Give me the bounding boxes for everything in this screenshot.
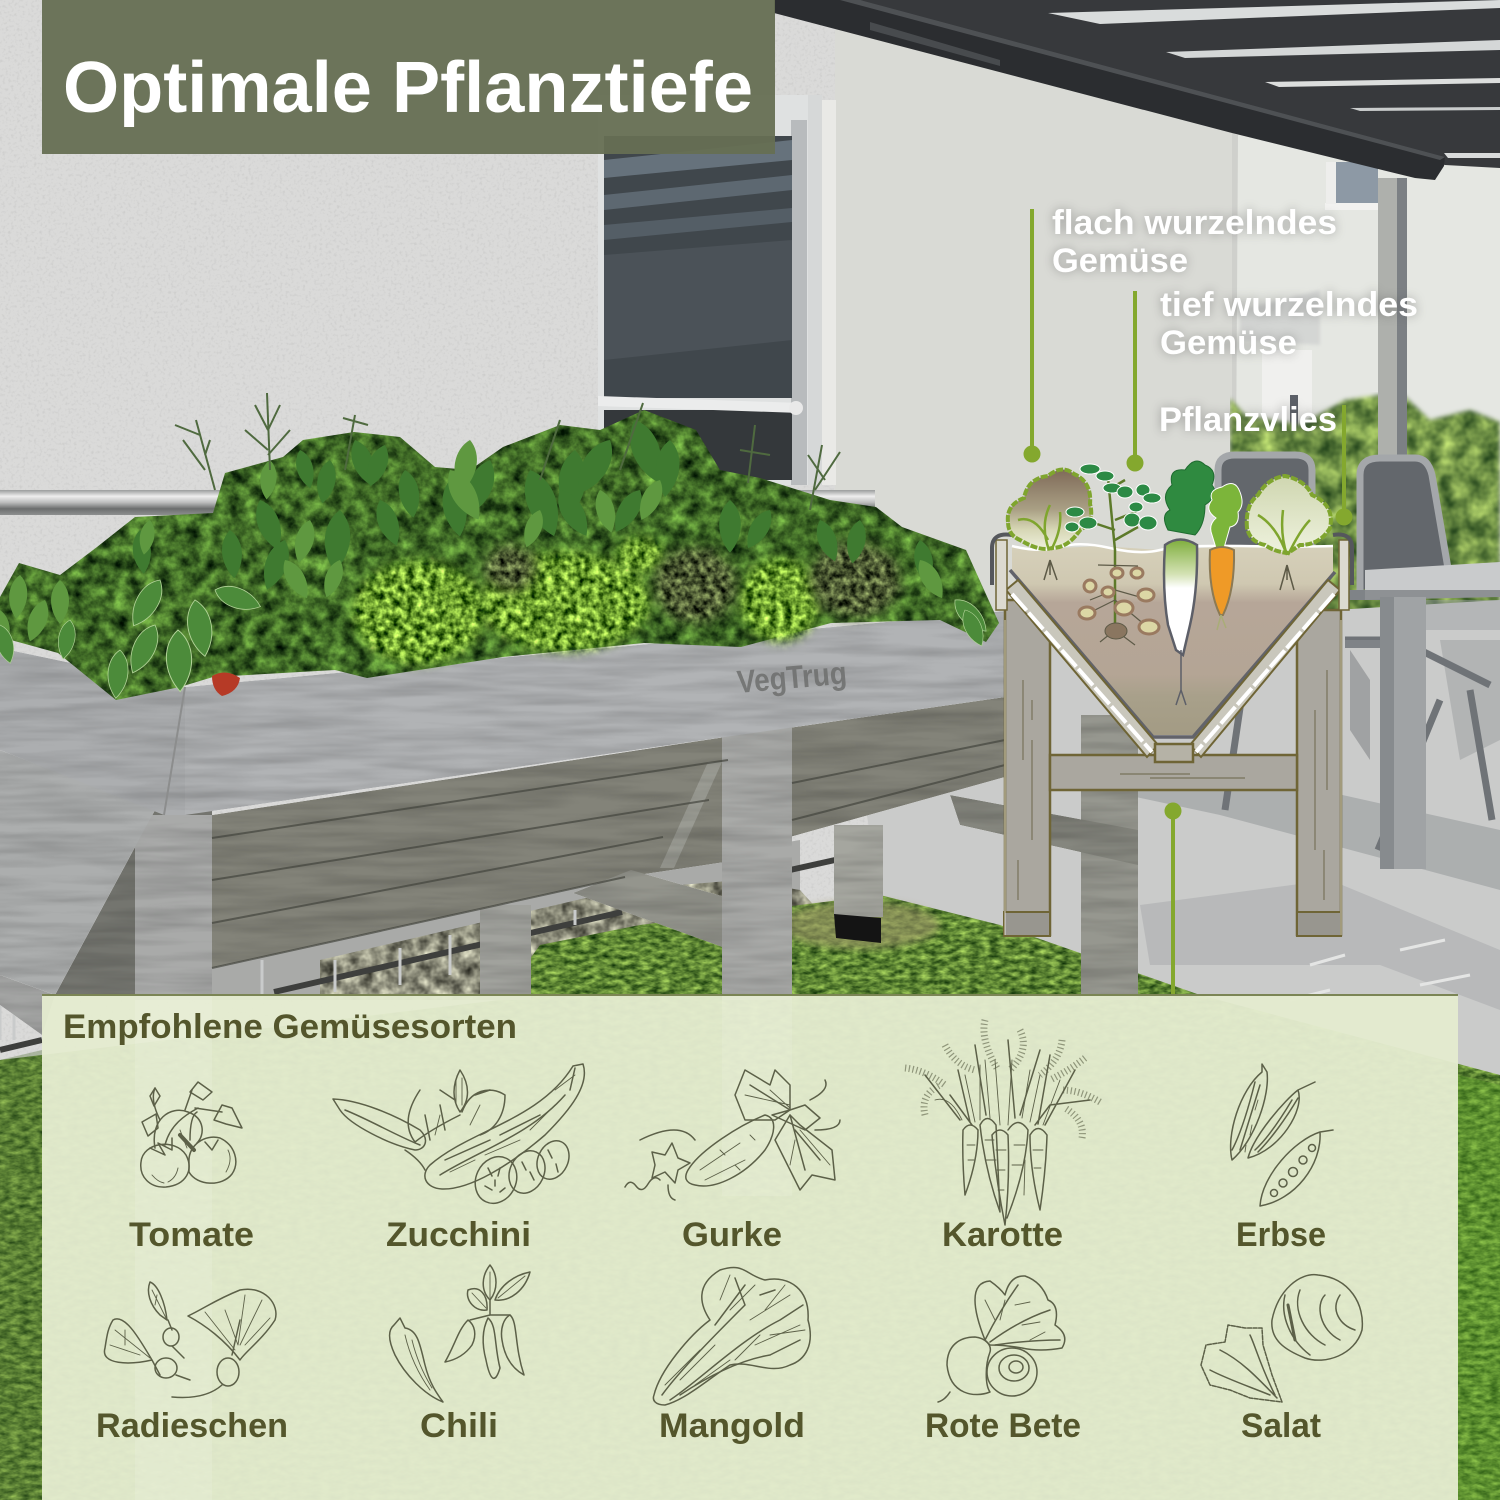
grey fleece liner — [1010, 570, 1335, 737]
hedge — [1230, 392, 1500, 640]
icon: zucchini — [333, 1064, 584, 1210]
leg foot — [834, 914, 881, 943]
bed brand mark: VegTrug — [735, 655, 848, 700]
panel: recommended vegetable varieties — [42, 994, 1458, 1500]
lower metal railing — [0, 860, 835, 1050]
icon: cucumber — [625, 1070, 840, 1200]
vegetable names, second row: Mangold — [659, 1407, 805, 1445]
icon: beetroot — [938, 1276, 1065, 1402]
foliage mass — [0, 410, 999, 700]
vegetable names, first row: Erbse — [1236, 1216, 1326, 1254]
crossbar — [1050, 755, 1297, 790]
lawn — [0, 895, 1500, 1500]
vegetable names, first row: Gurke — [682, 1216, 782, 1254]
icon: carrots — [905, 1020, 1100, 1225]
ground under the bed — [212, 840, 900, 1000]
label: flach wurzelndes Gemüse: flach wurzelndes — [1052, 204, 1337, 242]
planter cross-section diagram — [992, 461, 1352, 936]
building on the right — [1232, 130, 1500, 470]
pergola roof — [774, 0, 1500, 180]
vegetable names, second row: Chili — [420, 1407, 498, 1445]
label: tief wurzelndes Gemüse — [1160, 286, 1418, 362]
icon: peas — [1231, 1064, 1333, 1206]
label: tief wurzelndes Gemüse: tief wurzelndes — [1160, 286, 1418, 324]
slanted side boards — [212, 697, 1005, 968]
callout line: recommended varieties — [1164, 802, 1182, 995]
label: flach wurzelndes Gemüse: Gemüse — [1052, 242, 1188, 280]
planted foliage — [0, 393, 999, 700]
individual leaves — [0, 415, 992, 699]
callout line: Pflanzvlies — [1336, 405, 1352, 526]
title: Optimale Pflanztiefe — [63, 48, 753, 128]
panel heading: Empfohlene Gemüsesorten — [63, 1008, 517, 1046]
icon: lettuce — [1201, 1275, 1362, 1402]
right plank — [1190, 580, 1340, 757]
herb stems — [175, 393, 840, 510]
callout line: flach wurzelndes Gemüse — [1024, 209, 1040, 462]
patio floor — [840, 600, 1500, 1075]
vegetable names, first row: Karotte — [942, 1216, 1063, 1254]
left side post — [992, 535, 1012, 610]
right lettuce — [1247, 476, 1331, 590]
icon: tomato — [141, 1082, 242, 1187]
left leg — [1004, 600, 1050, 936]
vegetable names, first row: Zucchini — [386, 1216, 531, 1254]
vegetable names, second row: Salat — [1241, 1407, 1321, 1445]
label: flach wurzelndes Gemüse — [1052, 204, 1337, 280]
center bracket — [1155, 744, 1193, 762]
icon: chili — [390, 1265, 530, 1402]
pergola post — [1378, 178, 1407, 463]
label: tief wurzelndes Gemüse: Gemüse — [1160, 324, 1297, 362]
patio chairs — [1218, 455, 1492, 850]
vegetable names, second row — [96, 1407, 1321, 1445]
left plank — [1006, 580, 1158, 757]
title banner — [42, 0, 775, 154]
icon: radishes — [104, 1282, 276, 1398]
vegetable names, second row: Radieschen — [96, 1407, 288, 1445]
patio table — [1365, 562, 1500, 869]
metal railing — [0, 490, 875, 515]
raised bed body — [0, 611, 1005, 1035]
vegetable names, second row: Rote Bete — [925, 1407, 1081, 1445]
right leg — [1005, 610, 1341, 936]
soil — [1012, 546, 1333, 735]
left lettuce — [1008, 469, 1091, 580]
vegetable names, first row — [129, 1216, 1326, 1254]
icon: chard — [653, 1267, 810, 1405]
potato plant — [1065, 464, 1161, 645]
radish — [1164, 461, 1215, 705]
soil surface — [1012, 544, 1333, 552]
label: Pflanzvlies: Pflanzvlies — [1159, 401, 1337, 439]
vegetable names, first row: Tomate — [129, 1216, 254, 1254]
carrot — [1209, 483, 1242, 630]
window — [598, 95, 836, 485]
right side post — [1333, 535, 1352, 610]
small strawberry — [212, 672, 240, 696]
callout line: tief wurzelndes Gemüse — [1126, 291, 1144, 472]
raised bed legs behind — [480, 715, 1138, 1000]
